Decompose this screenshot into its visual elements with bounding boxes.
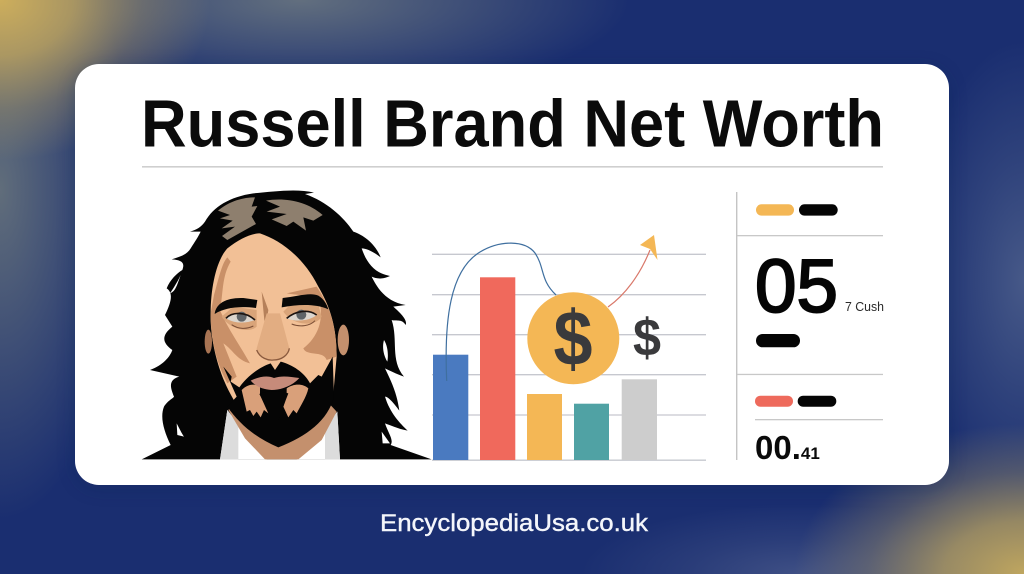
coin with dollar sign: $ xyxy=(554,294,592,382)
row divider xyxy=(755,419,883,420)
blue curve xyxy=(446,243,556,381)
grey hair streaks xyxy=(218,197,323,240)
lower face skin within beard xyxy=(242,385,308,417)
pills: coral and black xyxy=(755,396,836,407)
small dollar sign: $ xyxy=(633,308,661,368)
beard and moustache xyxy=(223,357,334,447)
ears xyxy=(338,325,349,355)
panel: white card xyxy=(75,64,949,485)
title: Russell Brand Net Worth xyxy=(141,88,884,162)
nose xyxy=(257,313,289,360)
eyes xyxy=(226,311,317,323)
chart grid lines xyxy=(432,254,706,460)
coral rising arrow line xyxy=(608,250,650,307)
stat number 00.41: 00.41 xyxy=(755,429,820,466)
face base xyxy=(211,233,337,440)
shirt collar xyxy=(220,410,340,459)
bar: teal xyxy=(574,404,609,460)
hair wisp highlights xyxy=(170,275,390,443)
pills: yellow and black xyxy=(756,204,838,216)
stat number 05: 05 xyxy=(755,244,838,328)
footer site name: EncyclopediaUsa.co.uk xyxy=(380,510,649,537)
card shadow xyxy=(75,68,949,489)
bar: grey xyxy=(622,379,657,460)
row divider xyxy=(737,235,883,236)
bar: blue xyxy=(433,355,468,460)
bar: coral xyxy=(480,277,515,460)
bar chart with rising arrow xyxy=(432,235,706,460)
face shadows xyxy=(211,257,250,383)
row divider xyxy=(737,374,883,375)
arrow head xyxy=(640,235,658,260)
bar: yellow xyxy=(527,394,562,460)
coin with dollar sign xyxy=(527,292,619,384)
hair silhouette and jacket xyxy=(142,191,432,459)
black pill xyxy=(756,334,800,347)
illustration: portrait of a man with long dark hair and beard xyxy=(142,191,432,459)
title divider xyxy=(142,166,883,168)
lips xyxy=(251,376,299,390)
stat caption: 7 Cush xyxy=(845,299,884,314)
vertical divider xyxy=(736,192,737,460)
eyebrows xyxy=(215,294,328,314)
neck xyxy=(228,387,337,459)
side stats column xyxy=(736,192,884,466)
